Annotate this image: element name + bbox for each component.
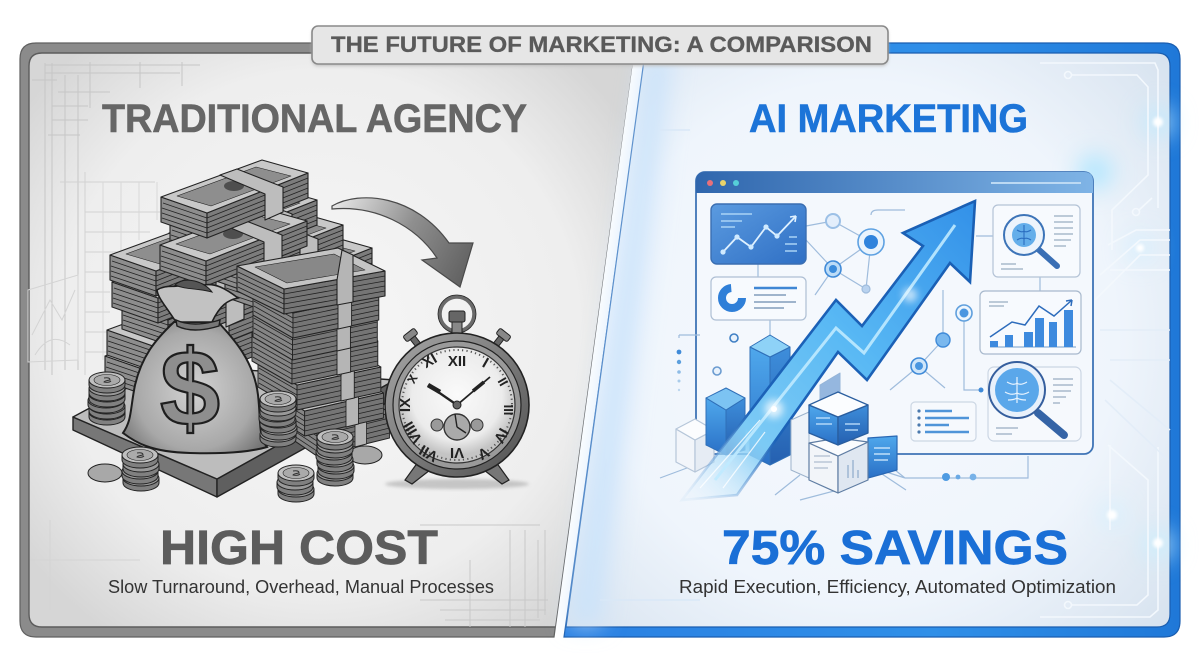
connector lines and nodes [660,210,1040,500]
card: brain magnifier bottom [988,362,1081,441]
clock numerals: II [495,375,511,389]
clock numerals: IV [490,425,512,446]
clock numerals: IX [397,398,414,412]
clock numerals [397,350,516,465]
clock numerals: III [501,405,516,415]
icon: stopwatch clock [385,295,529,489]
icon: wooden platform [73,365,395,497]
clock numerals: VI [450,444,464,461]
icon: stacks of cash [105,160,390,456]
chart: isometric cubes and bars [676,335,840,472]
window: browser dashboard [696,172,1093,454]
background circuit traces [600,63,1170,617]
icon: coin stacks [88,372,382,502]
background sketch grid [28,62,548,627]
arrow: big rising growth arrow [682,201,975,500]
clock numerals: VII [417,441,441,465]
text: ai benefits: Rapid Execution, Efficiency, Automated Optimization [679,577,1116,597]
glow: left edge and lights [570,55,1172,625]
nodes: glowing circles [677,229,984,481]
cube: white left [676,419,714,472]
clock numerals: VIII [400,418,426,446]
heading: traditional agency: TRADITIONAL AGENCY [102,97,527,141]
card: line chart [711,204,806,264]
card: list [911,402,976,441]
title banner [312,26,888,66]
heading: ai marketing: AI MARKETING [749,97,1028,141]
icon: dollar sign: $ [160,327,220,448]
panel: ai marketing [564,43,1180,637]
card: brain magnifier top [993,205,1080,277]
clock numerals: X [404,372,421,386]
title banner: THE FUTURE OF MARKETING: A COMPARISON [331,32,872,57]
icon: money bag with dollar sign [123,280,267,453]
panel: traditional agency [20,43,635,637]
text: traditional drawbacks: Slow Turnaround, Overhead, Manual Processes [108,577,494,597]
cube: back blue [820,373,840,420]
card: donut chart [711,277,806,320]
arrow: curved down arrow to clock [332,198,473,287]
card: bar and line chart [980,291,1081,354]
bar: medium blue [706,388,745,455]
illustration: ai dashboard [660,172,1093,500]
cubes: front data blocks [791,392,897,493]
clock numerals: XI [419,350,440,372]
text: high cost: HIGH COST [160,522,438,575]
illustration: money pile and stopwatch [73,160,529,502]
clock numerals: V [475,443,492,463]
clock numerals: I [479,355,491,372]
bar: tall blue [750,335,790,465]
clock numerals: XII [448,353,466,370]
text: 75% savings: 75% SAVINGS [722,522,1068,575]
